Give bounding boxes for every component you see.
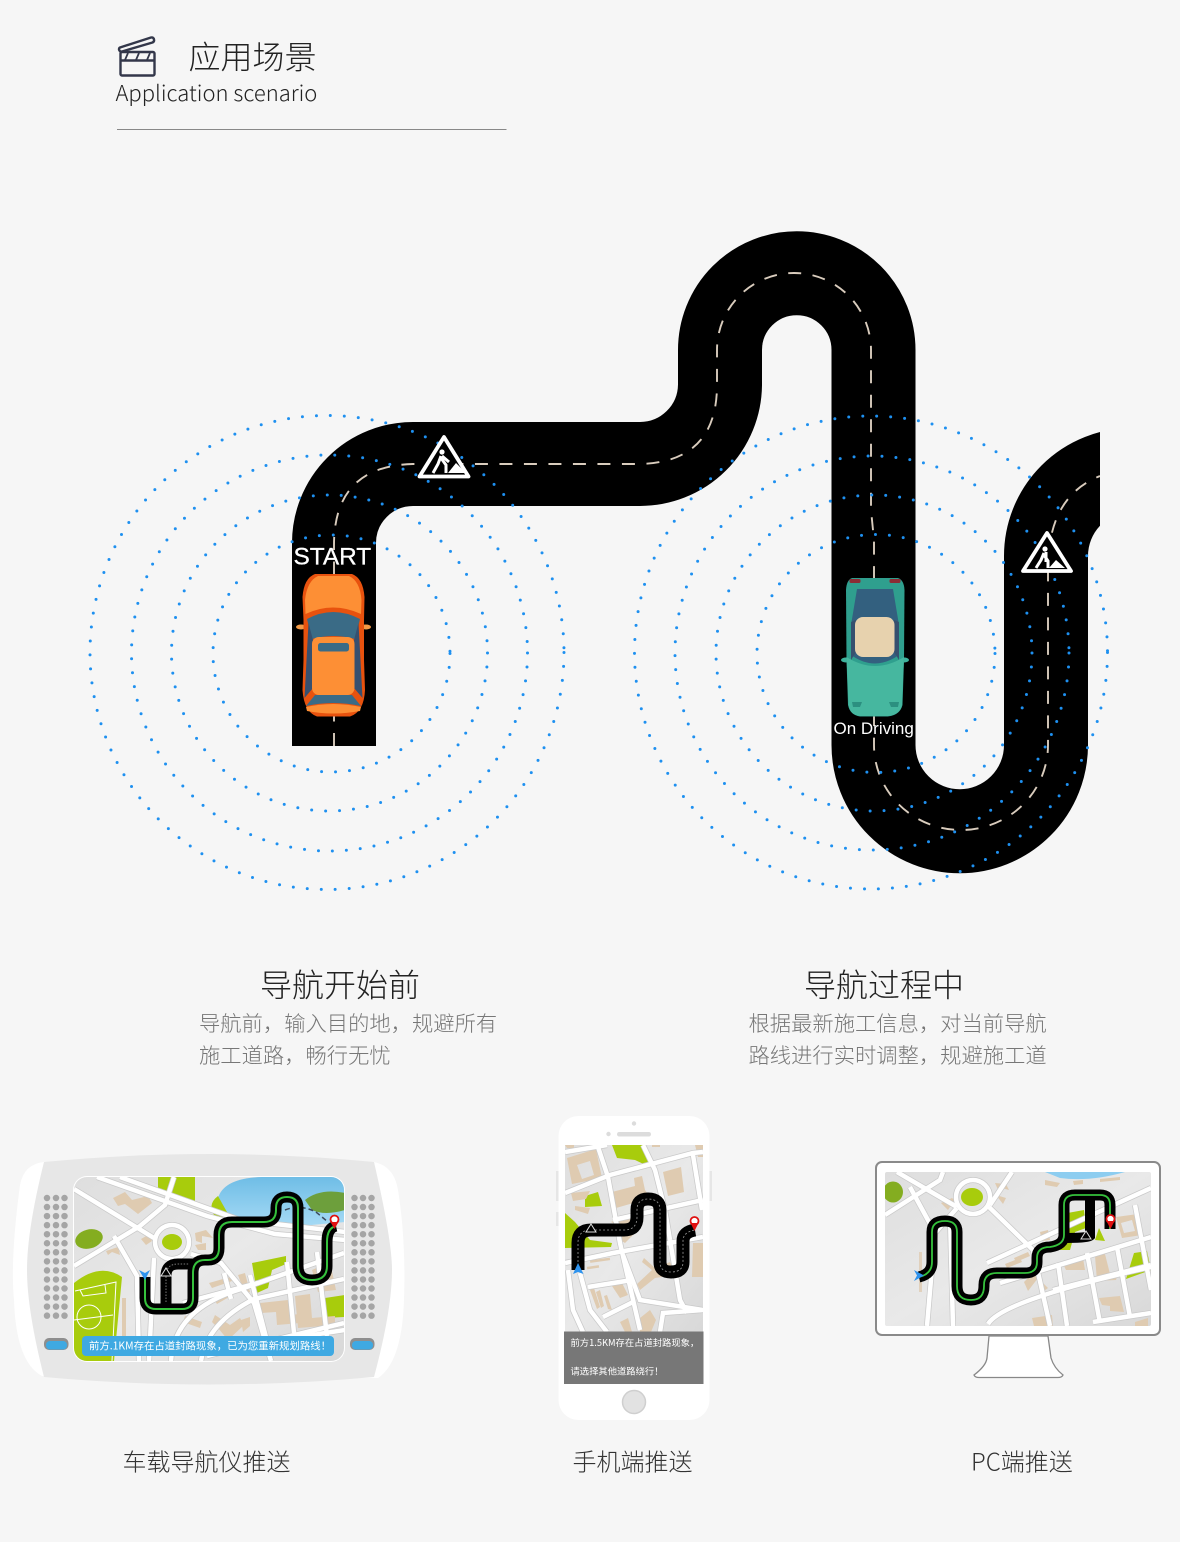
text block: before navigation [199,960,497,1070]
screen frame [73,1176,345,1362]
banner: reroute notice: 前方.1KM存在占道封路现象，已为您重新规划路线！ [89,1338,331,1352]
icon: road work sign right [1023,533,1071,571]
map: monitor [883,1172,1151,1326]
side buttons [44,1338,374,1350]
caption: phone: 手机端推送 [572,1442,692,1478]
route: monitor [919,1195,1110,1300]
route: phone [578,1199,695,1272]
road [334,273,1132,831]
icon: road work sign left [420,437,468,476]
label: On Driving: On Driving [834,719,914,738]
device: phone [556,1116,712,1420]
signal rings: left [90,416,564,890]
description [748,1007,1047,1070]
signal rings: right [634,416,1108,889]
map: phone [565,1145,703,1332]
text block: during navigation [748,960,1047,1070]
device: car navigator [13,1154,404,1384]
notice panel [564,1332,704,1384]
icon: warning [1081,1231,1091,1239]
description: 路线进行实时调整，规避施工道 [748,1039,1047,1070]
map: navigator [73,1177,345,1361]
header [116,32,506,130]
icon: arrow marker [914,1270,924,1281]
monitor stand [974,1336,1063,1378]
route: navigator [145,1197,336,1309]
device: monitor [876,1162,1160,1378]
icon: warning [586,1224,596,1232]
description: 根据最新施工信息，对当前导航 [748,1007,1047,1038]
description [199,1007,497,1070]
title chinese: 应用场景 [188,32,317,78]
speaker and camera [606,1121,651,1136]
icon: warning [161,1268,171,1276]
icon: clapperboard [119,37,154,76]
icon: arrow marker [573,1263,584,1274]
title english: Application scenario [116,76,317,108]
notice panel: 请选择其他道路绕行！ [570,1364,663,1378]
label: START: START [294,544,371,570]
speaker grids [47,1198,372,1316]
description: 导航前，输入目的地，规避所有 [199,1007,497,1038]
icon: pin [1106,1215,1114,1229]
icon: pin [690,1217,698,1231]
car: teal [841,578,909,716]
heading: 导航过程中 [804,960,964,1006]
monitor frame [876,1162,1160,1335]
navigator body [13,1162,404,1378]
home button [622,1390,646,1414]
header rule [117,129,506,130]
icon: arrow marker [139,1270,150,1280]
phone side buttons [556,1171,712,1226]
description: 施工道路，畅行无忧 [199,1039,391,1070]
heading: 导航开始前 [260,960,420,1006]
notice panel: 前方1.5KM存在占道封路现象， [570,1335,699,1349]
icon: pin [330,1216,338,1229]
car: orange [296,574,371,716]
phone body [558,1116,710,1420]
caption: monitor: PC端推送 [971,1442,1073,1478]
caption: navigator: 车载导航仪推送 [122,1442,290,1478]
illustration: road with cars [90,273,1132,890]
